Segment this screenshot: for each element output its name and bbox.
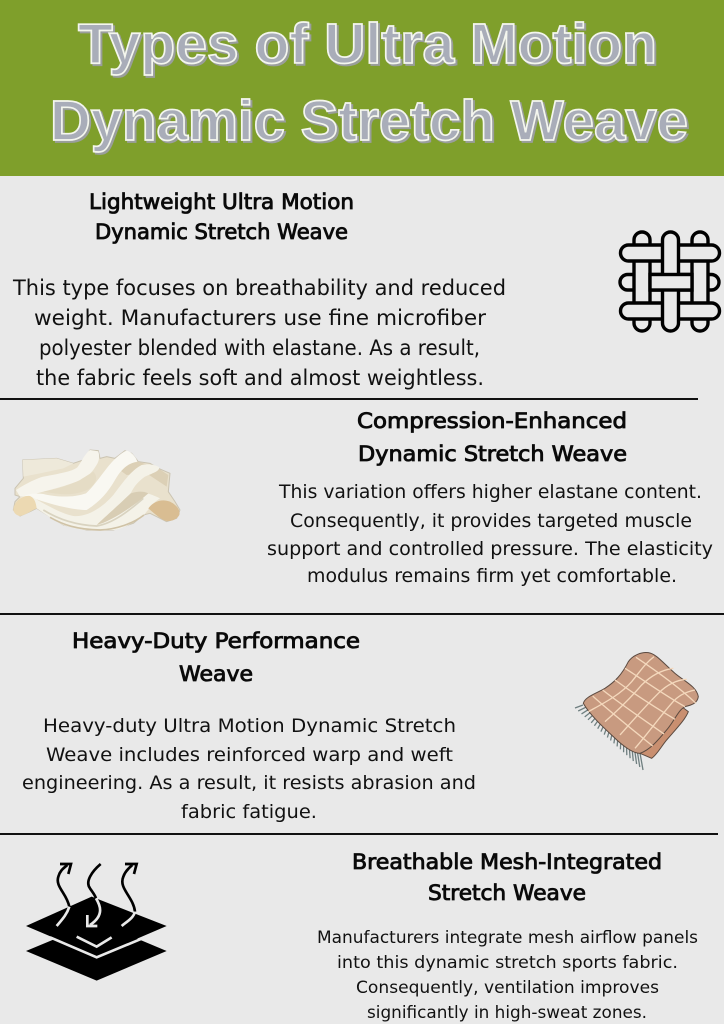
icon: breathable layers with airflow arrows — [26, 864, 167, 981]
text: compression description: Consequently, it provides targeted muscle — [290, 510, 692, 532]
heading: lightweight: Dynamic Stretch Weave — [95, 220, 348, 244]
divider — [0, 833, 718, 835]
text: compression description — [267, 481, 713, 587]
title: Types of Ultra Motion — [78, 12, 657, 76]
icon: white fabric towel — [13, 450, 180, 530]
heading: lightweight — [89, 190, 354, 244]
text: lightweight description — [12, 276, 506, 390]
text: lightweight description: polyester blended with elastane. As a result, — [39, 336, 480, 360]
heading: compression — [357, 409, 627, 466]
heading: breathable — [352, 850, 662, 905]
heading: breathable: Stretch Weave — [428, 881, 586, 905]
text: heavy-duty description: Heavy-duty Ultra Motion Dynamic Stretch — [43, 715, 456, 737]
heading: compression: Dynamic Stretch Weave — [358, 442, 627, 466]
heading: breathable: Breathable Mesh-Integrated — [352, 850, 662, 874]
text: breathable description: significantly in high-sweat zones. — [367, 1003, 647, 1023]
title: Dynamic Stretch Weave — [52, 91, 690, 155]
panel: breathable mesh weave — [26, 850, 698, 1023]
divider — [0, 398, 698, 400]
text: compression description: modulus remains firm yet comfortable. — [307, 565, 677, 587]
text: breathable description: into this dynamic stretch sports fabric. — [337, 953, 678, 973]
text: lightweight description: weight. Manufacturers use fine microfiber — [34, 306, 486, 330]
icon: plaid blanket — [575, 652, 698, 770]
text: lightweight description: the fabric feels soft and almost weightless. — [36, 366, 484, 390]
panel: heavy-duty weave — [22, 629, 698, 823]
heading: heavy-duty: Weave — [179, 662, 253, 686]
title: Dynamic Stretch Weave — [50, 89, 688, 153]
text: heavy-duty description: engineering. As a result, it resists abrasion and — [22, 772, 476, 794]
panel: compression weave — [13, 409, 713, 587]
divider — [0, 613, 724, 615]
text: heavy-duty description — [22, 715, 476, 823]
panel: lightweight weave — [12, 190, 719, 390]
text: heavy-duty description: fabric fatigue. — [181, 801, 317, 823]
text: breathable description: Manufacturers integrate mesh airflow panels — [317, 928, 698, 948]
text: heavy-duty description: Weave includes reinforced warp and weft — [46, 744, 453, 766]
heading: heavy-duty: Heavy-Duty Performance — [72, 629, 360, 653]
text: lightweight description: This type focuses on breathability and reduced — [12, 276, 506, 300]
text: compression description: support and controlled pressure. The elasticity — [267, 538, 713, 560]
heading: compression: Compression-Enhanced — [357, 409, 627, 433]
header banner — [0, 0, 724, 176]
text: breathable description — [317, 928, 698, 1023]
title: Types of Ultra Motion — [80, 14, 659, 78]
icon: woven fabric — [620, 232, 720, 331]
title — [50, 12, 690, 155]
text: breathable description: Consequently, ventilation improves — [356, 978, 659, 998]
heading: lightweight: Lightweight Ultra Motion — [89, 190, 354, 214]
text: compression description: This variation offers higher elastane content. — [278, 481, 702, 503]
heading: heavy-duty — [72, 629, 360, 686]
